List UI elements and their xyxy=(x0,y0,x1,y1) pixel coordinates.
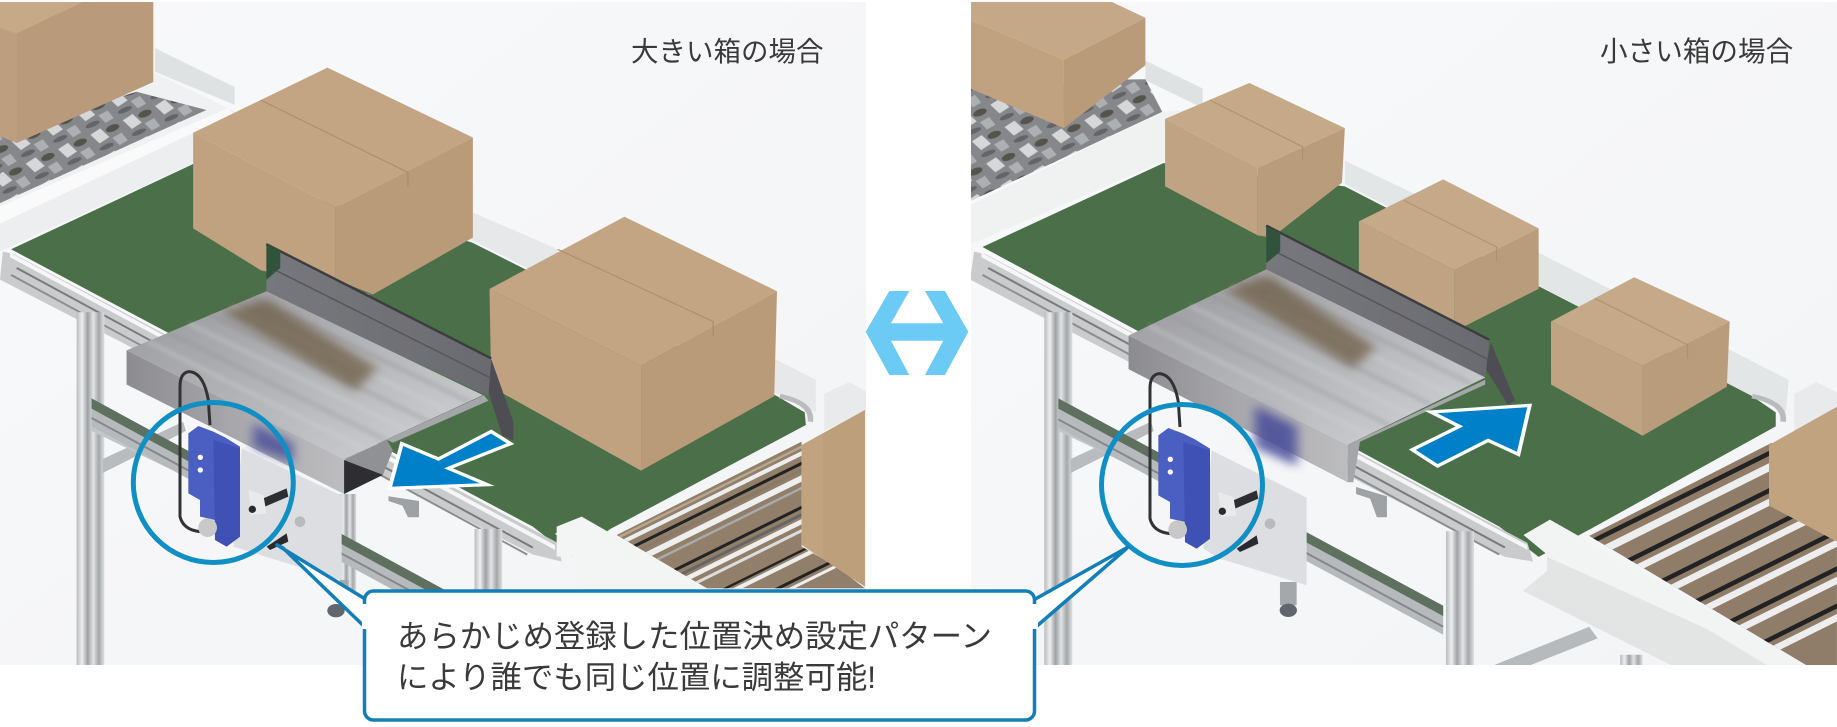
lower right rollers xyxy=(556,410,865,588)
cable xyxy=(1150,374,1180,534)
pointer: left xyxy=(277,545,370,632)
leveling foot xyxy=(327,580,349,617)
bracket plate xyxy=(1203,450,1307,585)
bubble box xyxy=(364,591,1034,720)
tray front lip xyxy=(0,108,244,252)
pointer joins xyxy=(362,604,1038,629)
left leg xyxy=(1044,312,1072,666)
white conveyor cover xyxy=(555,532,557,536)
bottom-right box xyxy=(1769,405,1837,543)
panel: large box scene xyxy=(0,2,893,686)
cover piece xyxy=(557,517,710,590)
panel: small box scene xyxy=(970,2,1837,727)
panel background xyxy=(0,2,866,665)
blue controller xyxy=(188,426,240,547)
arrow: move left xyxy=(390,432,511,488)
knob xyxy=(1168,520,1187,539)
small box 1 xyxy=(1165,83,1345,238)
heading: small box case: 小さい箱の場合 xyxy=(1600,36,1793,67)
conveyor illustration: large boxes xyxy=(0,2,870,666)
sensor unit xyxy=(1150,374,1307,617)
near rail xyxy=(970,252,1533,562)
indicators xyxy=(198,455,203,460)
panel background xyxy=(971,2,1837,665)
leveling foot xyxy=(1280,582,1297,617)
cross members xyxy=(1058,422,1154,475)
blue controller xyxy=(1158,428,1210,549)
near rail xyxy=(0,252,562,562)
cross members xyxy=(92,422,186,475)
under-rail bracket xyxy=(388,496,419,517)
callout ring: right sensor xyxy=(1102,404,1262,566)
large box: back xyxy=(193,68,473,295)
callout text line 1: あらかじめ登録した位置決め設定パターン xyxy=(397,619,992,654)
bolts xyxy=(1233,490,1258,509)
wheel rollers xyxy=(970,79,1162,201)
left leg xyxy=(77,312,104,666)
far rail xyxy=(472,212,816,412)
heading: large box case: 大きい箱の場合 xyxy=(631,36,824,67)
cross beam xyxy=(91,398,444,590)
upper-left side rail xyxy=(1145,61,1203,108)
large box: front xyxy=(490,217,777,471)
pointer: right xyxy=(1030,547,1128,632)
guide plate xyxy=(1129,226,1489,482)
callout bubble xyxy=(277,545,1128,720)
belt end pulley xyxy=(1752,396,1783,422)
green belt xyxy=(11,164,806,557)
small box 3 xyxy=(1551,277,1730,436)
sensor unit xyxy=(180,372,349,617)
knob xyxy=(198,518,217,537)
bottom-right box xyxy=(802,410,865,587)
top-left box xyxy=(970,2,1145,128)
adjuster strut xyxy=(1485,343,1515,404)
wheel rollers xyxy=(0,92,206,203)
green belt xyxy=(982,163,1776,557)
arrow: move right xyxy=(1412,405,1530,466)
guide plate xyxy=(127,243,491,494)
diagonal base strut xyxy=(1491,627,1598,666)
belt end pulley xyxy=(780,396,811,422)
bracket plate xyxy=(233,448,342,580)
far rail xyxy=(1345,161,1789,412)
small box 2 xyxy=(1359,179,1539,329)
adjuster strut xyxy=(488,359,513,440)
upper-left side rail xyxy=(155,48,235,105)
cable xyxy=(180,372,210,532)
end block xyxy=(824,382,870,431)
end block xyxy=(1794,382,1837,431)
conveyor illustration: small boxes xyxy=(970,2,1837,727)
callout text line 2: により誰でも同じ位置に調整可能! xyxy=(397,660,876,695)
indicators xyxy=(1168,457,1173,462)
roller tray xyxy=(0,73,228,210)
tray front lip xyxy=(970,108,1203,245)
white conveyor cover xyxy=(1523,520,1808,666)
callout ring: left sensor xyxy=(133,402,293,562)
icon: double-headed switch arrow xyxy=(866,291,968,375)
right leg xyxy=(1446,531,1474,666)
top-left box xyxy=(0,2,153,143)
bolts xyxy=(263,488,288,507)
lower right rollers xyxy=(1578,403,1837,727)
under-rail bracket xyxy=(1356,487,1387,517)
middle legs xyxy=(475,529,502,594)
cross beam xyxy=(1058,398,1443,635)
